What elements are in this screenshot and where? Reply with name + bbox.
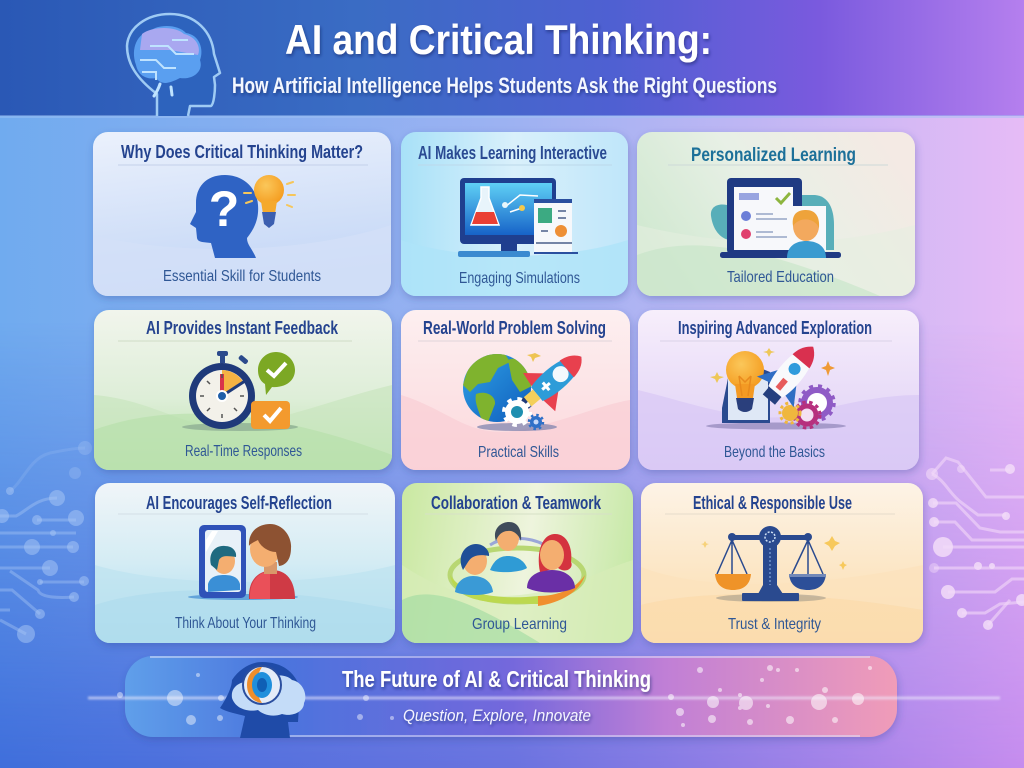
caption: Group Learning — [472, 616, 567, 633]
panel: real-world problem solving — [401, 310, 630, 470]
heading: Real-World Problem Solving — [423, 318, 606, 338]
footer tagline: Question, Explore, Innovate — [403, 706, 591, 725]
footer banner — [88, 656, 1000, 738]
header band — [0, 0, 1024, 118]
caption: Essential Skill for Students — [163, 268, 321, 285]
caption: Tailored Education — [727, 269, 834, 286]
heading: Ethical & Responsible Use — [693, 493, 852, 513]
panel: interactive learning — [401, 132, 628, 296]
subtitle: How Artificial Intelligence Helps Students Ask the Right Questions — [232, 73, 777, 98]
footer title: The Future of AI & Critical Thinking — [342, 666, 651, 692]
caption: Real-Time Responses — [185, 443, 302, 460]
heading: Inspiring Advanced Exploration — [678, 318, 872, 338]
icon: bulb, rocket and gears — [706, 331, 846, 430]
caption: Engaging Simulations — [459, 270, 580, 287]
icon: head with circuit brain — [127, 14, 220, 116]
panel: inspiring advanced exploration — [638, 310, 919, 470]
icon: head with magnifying eye — [220, 662, 305, 738]
icon: globe, rocket and gears — [463, 353, 582, 431]
heading: Collaboration & Teamwork — [431, 493, 602, 513]
heading: Why Does Critical Thinking Matter? — [121, 142, 363, 162]
icon: computer with flask and tablet — [458, 178, 578, 257]
icon: stopwatch with check marks — [182, 351, 298, 431]
panel: self-reflection — [95, 483, 395, 643]
heading: AI Provides Instant Feedback — [146, 318, 339, 338]
panel: instant feedback — [94, 310, 392, 470]
panel: ethical and responsible use — [641, 483, 923, 643]
caption: Think About Your Thinking — [175, 615, 316, 632]
icon: laptop with checklist and student — [711, 178, 841, 258]
panel: personalized learning — [637, 132, 915, 296]
right circuit decoration — [926, 458, 1024, 630]
caption: Practical Skills — [478, 444, 559, 461]
caption: Trust & Integrity — [728, 616, 821, 633]
left circuit decoration — [0, 441, 92, 643]
caption: Beyond the Basics — [724, 444, 825, 461]
heading: AI Makes Learning Interactive — [418, 143, 607, 163]
icon: head with question mark and light bulb — [190, 175, 295, 258]
panel: why critical thinking matters — [93, 132, 391, 296]
heading: AI Encourages Self-Reflection — [146, 493, 332, 513]
icon: balance scale — [701, 526, 847, 602]
panel: collaboration and teamwork — [402, 483, 633, 643]
icon: head with question mark and light bulb: ? — [209, 181, 239, 237]
icon: three students in a circle — [450, 522, 585, 606]
icon: student looking in a mirror — [188, 524, 298, 600]
heading: Personalized Learning — [691, 145, 856, 166]
title: AI and Critical Thinking: — [285, 16, 712, 63]
